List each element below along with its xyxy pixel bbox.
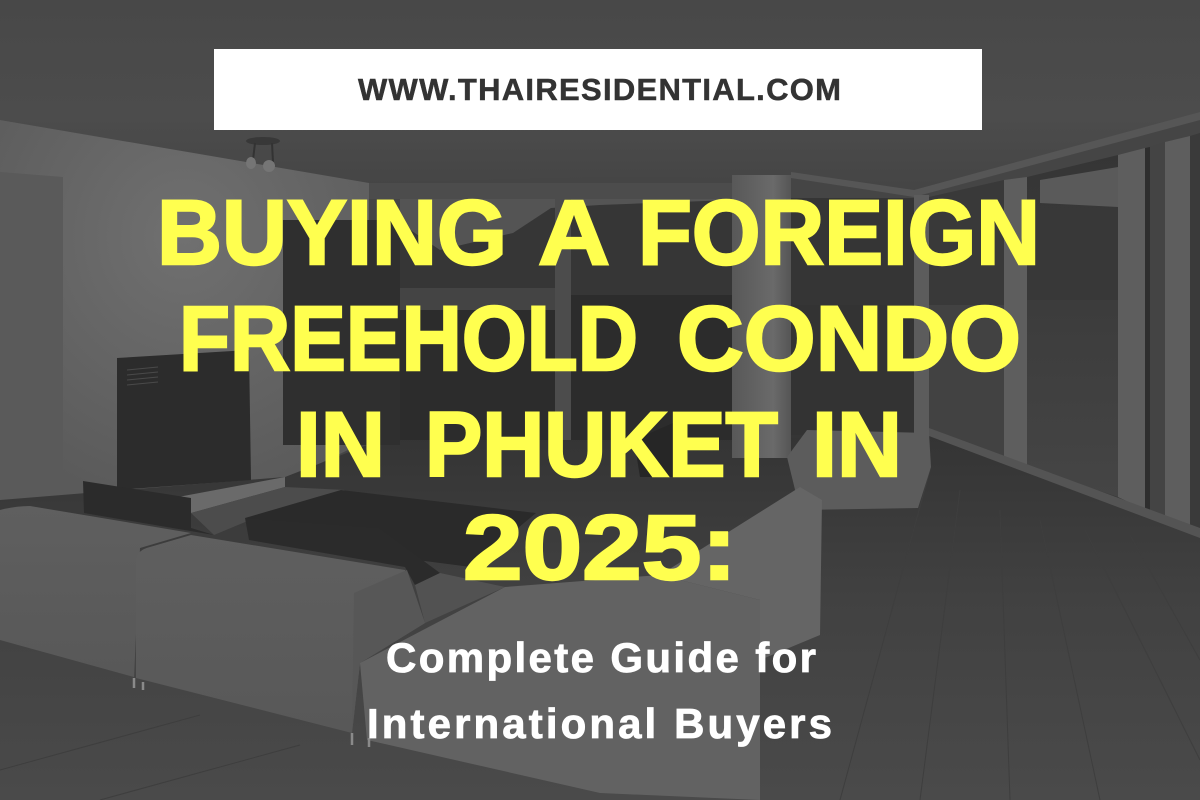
coffee table [245, 490, 536, 567]
right window pane two [1027, 155, 1118, 497]
pale sky pane [1040, 167, 1118, 207]
subtitle: International Buyers [367, 700, 832, 747]
pillar two [1118, 148, 1145, 510]
city lights band [400, 288, 560, 310]
sofa legs [134, 678, 369, 747]
title: IN [812, 394, 902, 496]
low floor patch behind sofa [191, 487, 345, 535]
dark chair in centre [634, 420, 680, 477]
title: A [538, 182, 610, 284]
window mullions [555, 199, 571, 440]
armchair [787, 430, 931, 510]
floor patch between [415, 573, 505, 623]
title: CONDO [677, 288, 1021, 390]
television [117, 350, 251, 490]
pillar one [1004, 177, 1027, 467]
left wall [0, 120, 369, 510]
centre window sky [400, 199, 732, 269]
sofa right back section [660, 487, 822, 660]
title: PHUKET [425, 394, 778, 496]
title: FREEHOLD [179, 288, 638, 390]
tv vents [127, 367, 158, 385]
sofa arm shading [352, 570, 425, 733]
cushion one [83, 481, 214, 535]
subtitle [367, 634, 832, 747]
title: IN [296, 394, 385, 496]
cushion two [245, 518, 440, 585]
title: BUYING [157, 182, 507, 284]
centre column [732, 175, 791, 458]
sofa left section [0, 506, 191, 677]
ceiling light band [791, 112, 1200, 197]
floor planks [0, 470, 1200, 800]
pillar three [1165, 136, 1190, 530]
header strip above window [369, 183, 732, 199]
right window pane one [929, 180, 1004, 457]
window base sill [929, 428, 1200, 538]
floor [0, 433, 1200, 800]
title: FOREIGN [638, 182, 1040, 284]
title: 2025: [463, 497, 737, 599]
media console base [178, 477, 285, 513]
sofa chaise section [360, 575, 760, 800]
left pillar [0, 172, 63, 510]
window right of column [791, 198, 914, 438]
sofa centre section [136, 535, 425, 733]
url banner: WWW.THAIRESIDENTIAL.COM [358, 72, 841, 107]
subtitle: Complete Guide for [386, 634, 816, 681]
frame strip [914, 195, 929, 435]
ceiling [0, 0, 1200, 195]
centre window mountains [400, 200, 732, 305]
ceiling spotlight fixture [246, 137, 280, 172]
title [157, 182, 1040, 599]
url banner [214, 49, 982, 130]
mountains pane two [1027, 215, 1118, 300]
centre window city and water [400, 295, 732, 440]
doorway section [283, 220, 400, 445]
